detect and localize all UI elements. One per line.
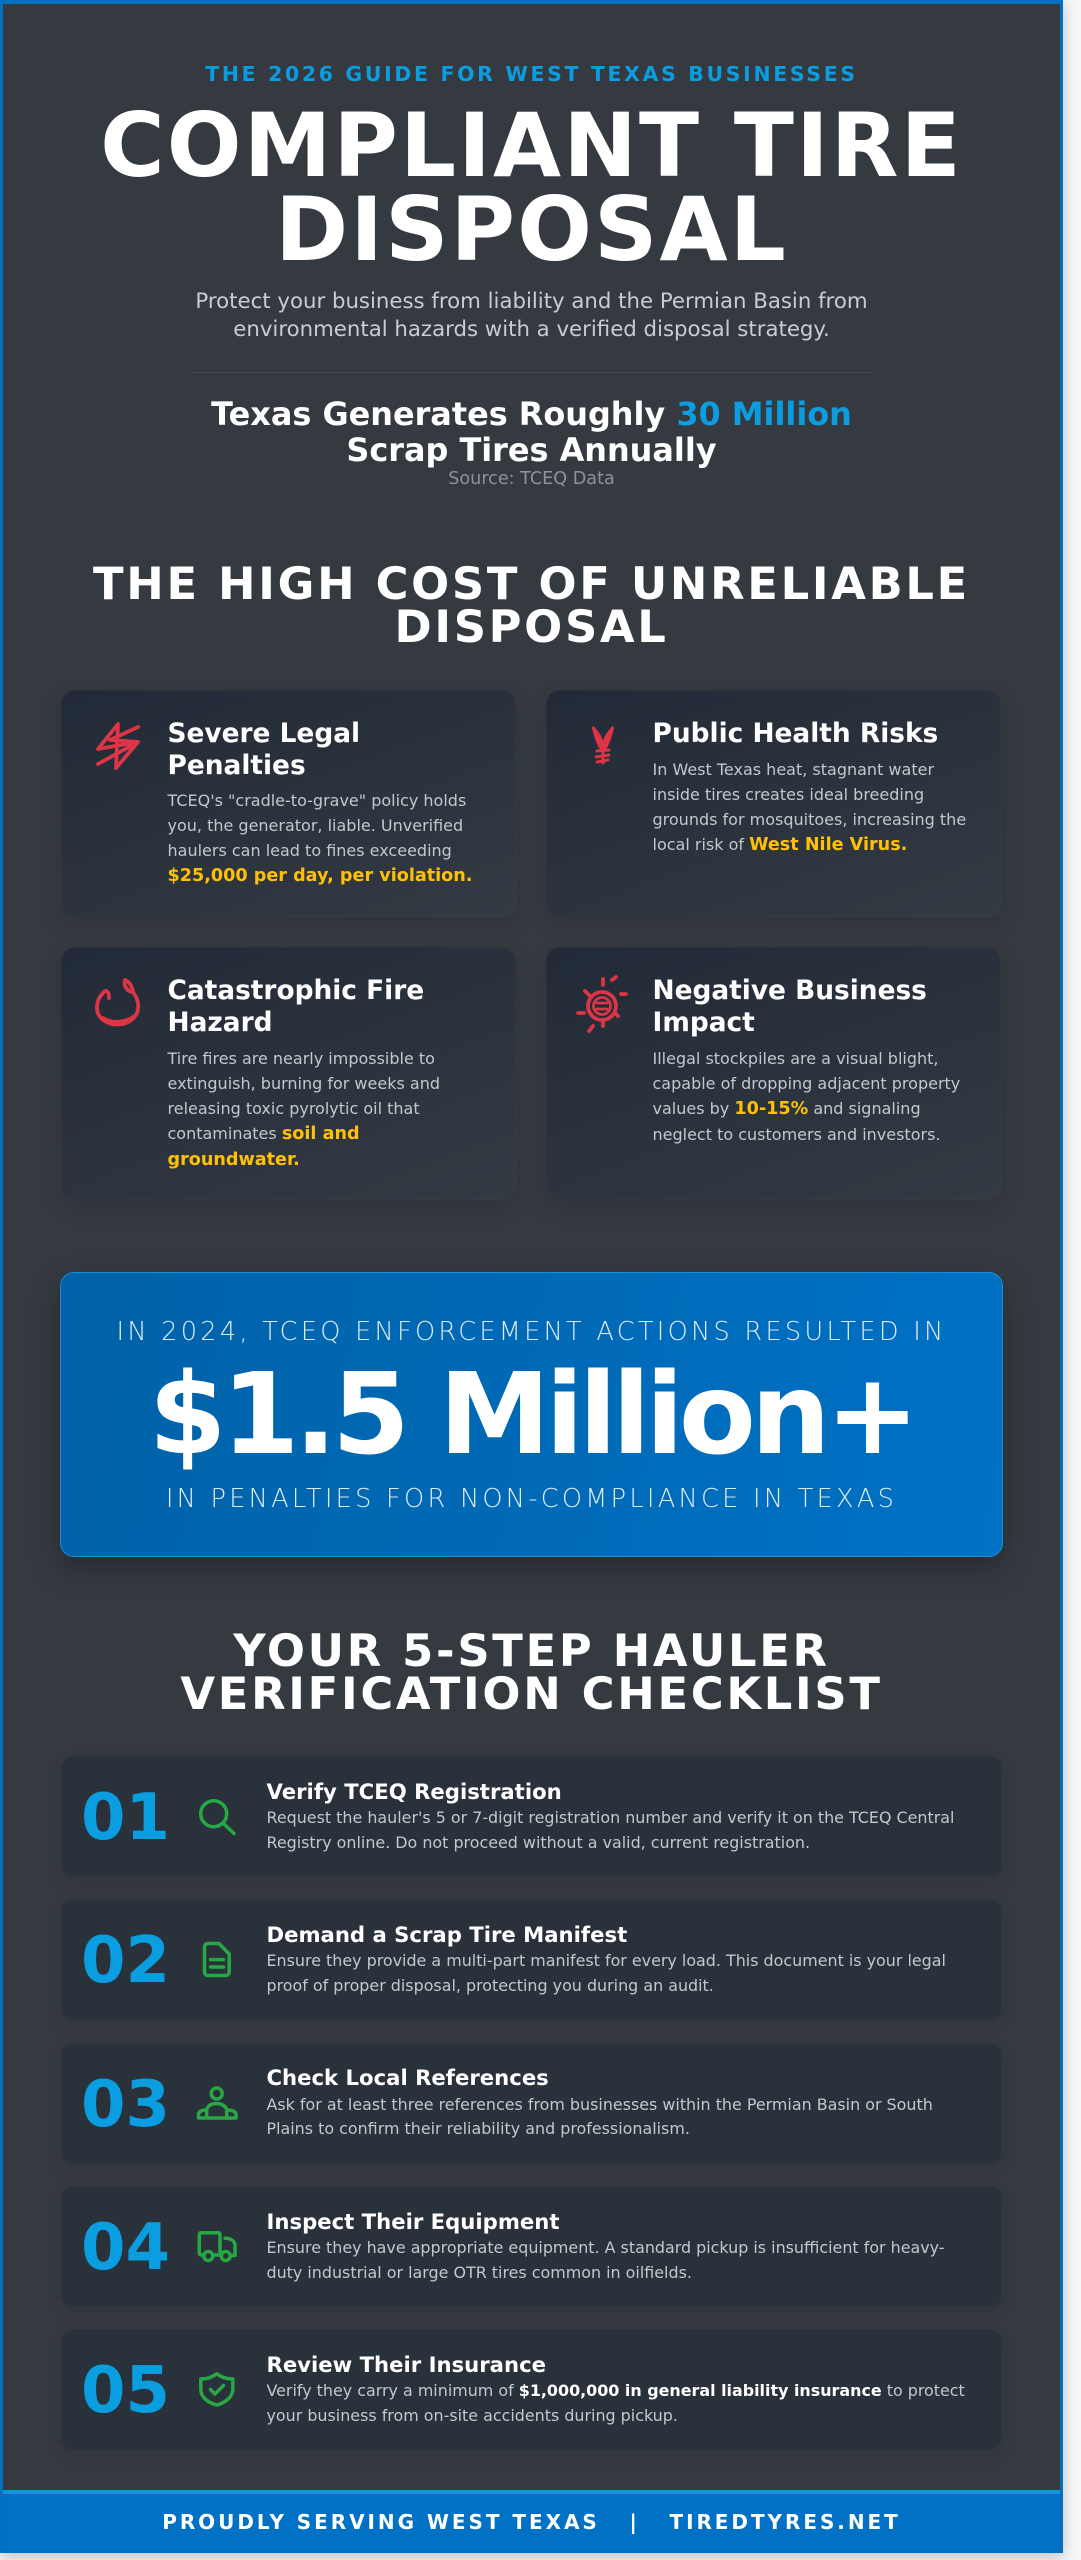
body: Ensure they have appropriate equipment. A standard pickup is insufficient for heavy- bbox=[266, 2238, 945, 2257]
body: inside tires creates ideal breeding bbox=[652, 785, 924, 804]
panel: public health risks bbox=[546, 690, 1001, 917]
panel: severe legal penalties bbox=[61, 690, 516, 917]
body bbox=[266, 1951, 946, 1995]
icon: truck bbox=[198, 2231, 237, 2262]
body: you, the generator, liable. Unverified bbox=[168, 816, 463, 834]
heading: Check Local References bbox=[266, 2065, 549, 2090]
subtitle: Protect your business from liability and the Permian Basin from bbox=[195, 288, 868, 314]
body: grounds for mosquitoes, increasing the bbox=[652, 810, 966, 829]
heading: checklist: YOUR 5-STEP HAULER bbox=[233, 1624, 830, 1676]
footer bbox=[3, 2490, 1060, 2553]
body: In West Texas heat, stagnant water bbox=[652, 760, 934, 779]
heading: Severe Legal bbox=[168, 718, 360, 749]
icon: fire ring bbox=[95, 978, 140, 1026]
body: releasing toxic pyrolytic oil that bbox=[168, 1098, 420, 1118]
icon: people bbox=[196, 2086, 238, 2120]
title: COMPLIANT TIRE bbox=[100, 94, 963, 196]
banner caption: IN PENALTIES FOR NON-COMPLIANCE IN TEXAS bbox=[166, 1484, 897, 1514]
body bbox=[167, 1048, 440, 1170]
heading: Impact bbox=[652, 1007, 755, 1038]
step 4 bbox=[61, 2186, 1002, 2307]
body: Tire fires are nearly impossible to bbox=[168, 1048, 435, 1068]
body bbox=[167, 790, 472, 886]
body: groundwater. bbox=[168, 1150, 300, 1170]
step 1 bbox=[61, 1756, 1002, 1877]
heading: checklist bbox=[180, 1624, 883, 1720]
banner figure: $1.5 Million+ bbox=[149, 1350, 914, 1480]
heading: Hazard bbox=[168, 1007, 272, 1038]
body bbox=[652, 760, 966, 855]
heading: high cost: THE HIGH COST OF UNRELIABLE bbox=[93, 557, 970, 610]
body bbox=[266, 1808, 954, 1852]
body: neglect to customers and investors. bbox=[652, 1124, 940, 1144]
panel: negative business impact bbox=[546, 947, 1001, 1200]
source: Source: TCEQ Data bbox=[448, 469, 615, 489]
icon: legal bolt bbox=[96, 722, 140, 770]
heading: Verify TCEQ Registration bbox=[266, 1778, 562, 1804]
body: Plains to confirm their reliability and professionalism. bbox=[266, 2119, 690, 2138]
heading: Penalties bbox=[168, 750, 306, 781]
title bbox=[100, 94, 963, 281]
panel: catastrophic fire hazard bbox=[61, 947, 516, 1200]
body bbox=[266, 2381, 965, 2425]
subtitle bbox=[195, 288, 868, 342]
statistic: scrap tires: Texas Generates Roughly 30 Million bbox=[211, 394, 852, 432]
banner lead-in: IN 2024, TCEQ ENFORCEMENT ACTIONS RESULTED IN bbox=[116, 1316, 946, 1346]
heading: high cost bbox=[93, 557, 970, 653]
body: your business from on-site accidents during pickup. bbox=[266, 2406, 678, 2425]
number: 03 bbox=[81, 2068, 170, 2142]
number: 02 bbox=[81, 1924, 170, 1998]
body: proof of proper disposal, protecting you during an audit. bbox=[266, 1976, 714, 1995]
heading: Demand a Scrap Tire Manifest bbox=[266, 1922, 627, 1947]
step 5 bbox=[61, 2329, 1002, 2450]
statistic: scrap tires: Scrap Tires Annually bbox=[346, 430, 717, 468]
body: contaminates soil and bbox=[168, 1124, 360, 1144]
body: Request the hauler's 5 or 7-digit registration number and verify it on the TCEQ Central bbox=[266, 1808, 954, 1827]
body: haulers can lead to fines exceeding bbox=[168, 840, 452, 860]
body: $25,000 per day, per violation. bbox=[168, 866, 472, 886]
body: Ask for at least three references from businesses within the Permian Basin or South bbox=[266, 2095, 933, 2114]
body: Registry online. Do not proceed without a valid, current registration. bbox=[266, 1832, 810, 1852]
body: capable of dropping adjacent property bbox=[652, 1074, 960, 1092]
heading: Catastrophic Fire bbox=[168, 975, 424, 1006]
body: Ensure they provide a multi-part manifest for every load. This document is your legal bbox=[266, 1951, 946, 1970]
icon: magnifier bbox=[198, 1799, 236, 1836]
body: TCEQ's "cradle-to-grave" policy holds bbox=[168, 790, 466, 810]
kicker: THE 2026 GUIDE FOR WEST TEXAS BUSINESSES bbox=[205, 62, 858, 86]
heading: Review Their Insurance bbox=[266, 2352, 546, 2377]
body: local risk of West Nile Virus. bbox=[652, 835, 907, 855]
heading bbox=[168, 975, 424, 1038]
body bbox=[266, 2238, 945, 2282]
icon: blight burst bbox=[576, 975, 628, 1033]
number: 05 bbox=[81, 2354, 170, 2428]
heading: Public Health Risks bbox=[652, 718, 938, 749]
body: Illegal stockpiles are a visual blight, bbox=[652, 1048, 938, 1068]
icon: document bbox=[202, 1942, 231, 1978]
body: Verify they carry a minimum of $1,000,000 in general liability insurance to protect bbox=[266, 2381, 965, 2400]
statistic: scrap tires bbox=[211, 394, 852, 468]
heading bbox=[652, 975, 927, 1038]
callout: penalties banner bbox=[60, 1272, 1003, 1557]
icon: shield check bbox=[199, 2372, 235, 2407]
step 3 bbox=[61, 2043, 1002, 2164]
step 2 bbox=[61, 1899, 1002, 2020]
icon: mosquito bbox=[592, 726, 614, 764]
footer text: PROUDLY SERVING WEST TEXAS | TIREDTYRES.NET bbox=[162, 2510, 901, 2534]
body: duty industrial or large OTR tires common in oilfields. bbox=[266, 2262, 692, 2282]
number: 04 bbox=[81, 2211, 170, 2285]
heading: Inspect Their Equipment bbox=[266, 2208, 559, 2234]
title: DISPOSAL bbox=[275, 178, 788, 281]
subtitle: environmental hazards with a verified disposal strategy. bbox=[233, 316, 830, 342]
heading: high cost: DISPOSAL bbox=[394, 600, 669, 653]
number: 01 bbox=[81, 1781, 170, 1855]
heading bbox=[168, 718, 360, 781]
body bbox=[266, 2095, 933, 2138]
heading: Negative Business bbox=[652, 975, 927, 1006]
body bbox=[652, 1048, 960, 1144]
heading: checklist: VERIFICATION CHECKLIST bbox=[180, 1666, 883, 1720]
body: values by 10-15% and signaling bbox=[652, 1098, 921, 1118]
body: extinguish, burning for weeks and bbox=[168, 1074, 440, 1092]
